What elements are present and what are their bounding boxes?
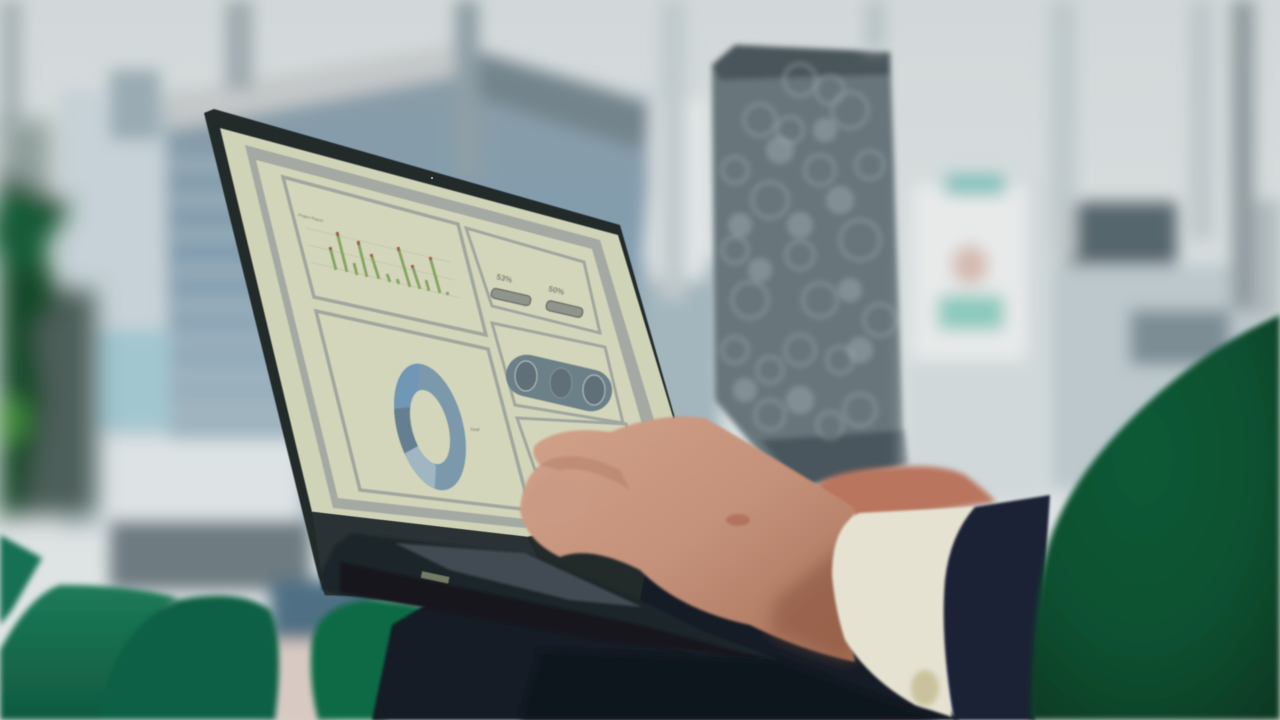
wrist shadow bbox=[770, 540, 855, 662]
skin mark bbox=[726, 514, 750, 526]
suit sleeve bbox=[944, 495, 1050, 720]
shirt cuff bbox=[832, 507, 975, 717]
near hand bbox=[520, 417, 855, 662]
donut labels: Total bbox=[470, 427, 480, 432]
stats panel bbox=[466, 228, 600, 333]
stats panel: 50% bbox=[548, 284, 565, 297]
screen dashboard bbox=[245, 145, 672, 528]
green armchair bbox=[1030, 315, 1280, 720]
laptop base bbox=[320, 533, 780, 660]
blurred right buildings and billboard bbox=[865, 0, 1280, 500]
side port bbox=[421, 571, 450, 584]
gauges bbox=[515, 361, 605, 405]
green sofa left bbox=[0, 535, 279, 720]
donut hole bbox=[403, 386, 457, 468]
dark lap shadow bbox=[520, 650, 940, 720]
keyboard bbox=[395, 543, 642, 607]
donut panel bbox=[316, 311, 530, 510]
stat values: 53% bbox=[496, 272, 513, 285]
stat pill 1 bbox=[490, 288, 532, 306]
cuff button bbox=[911, 670, 939, 706]
bottom panel bbox=[517, 418, 640, 470]
knuckle shading bbox=[522, 470, 590, 526]
trouser leg bbox=[372, 560, 960, 720]
base underside bbox=[340, 562, 770, 660]
blurred plant bbox=[0, 120, 95, 520]
chart panel bbox=[283, 177, 486, 335]
laptop bbox=[204, 109, 780, 660]
lid lower bezel bbox=[312, 512, 560, 600]
donut chart bbox=[393, 363, 466, 491]
green sofa middle bbox=[311, 600, 430, 720]
gauge pill bbox=[502, 350, 616, 416]
bar chart bbox=[330, 232, 448, 295]
blurred central tower bbox=[712, 45, 910, 490]
stat pill 2 bbox=[545, 300, 584, 318]
laptop lid bbox=[204, 109, 675, 600]
chart label: Project Report bbox=[298, 212, 325, 223]
webcam bbox=[431, 177, 433, 179]
laptop screen bbox=[220, 128, 673, 537]
gauge panel bbox=[492, 323, 623, 423]
far hand bbox=[816, 466, 996, 518]
